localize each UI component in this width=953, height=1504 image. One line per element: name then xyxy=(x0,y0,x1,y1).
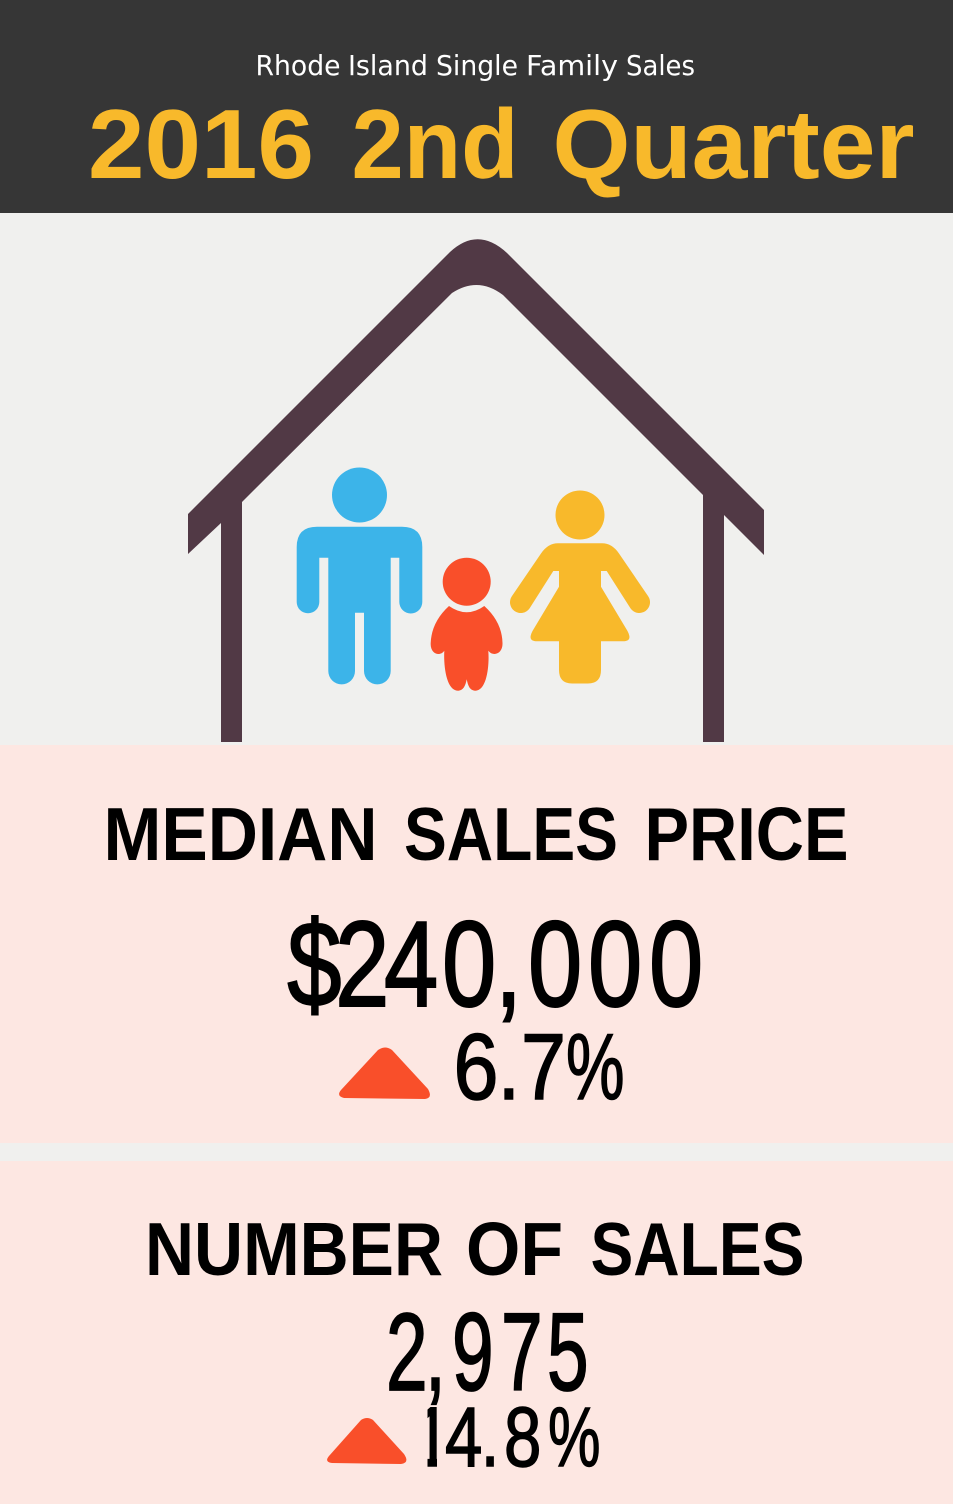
subtitle xyxy=(256,49,695,82)
panel: header xyxy=(0,0,953,213)
title: 2nd xyxy=(352,89,518,199)
icon: child xyxy=(431,558,503,691)
icon: up arrow xyxy=(327,1418,406,1464)
subtitle: Single xyxy=(436,49,518,82)
icon: up arrow xyxy=(339,1048,430,1099)
icon: house outline xyxy=(188,239,764,742)
heading: median sales price: MEDIAN xyxy=(104,792,378,876)
title xyxy=(88,89,914,199)
panel: median sales price xyxy=(0,745,953,1143)
title: 2016 xyxy=(88,89,314,199)
icon: house with family xyxy=(188,239,764,742)
subtitle: Rhode xyxy=(256,49,340,82)
heading: number of sales: NUMBER xyxy=(145,1207,443,1291)
subtitle: Sales xyxy=(626,49,695,82)
value: price change: % xyxy=(566,1016,625,1120)
value: price change xyxy=(453,1014,625,1120)
subtitle: Island xyxy=(348,49,428,82)
value: price change: 6.7 xyxy=(453,1014,566,1119)
icon: mother xyxy=(510,490,650,684)
panel: number of sales xyxy=(0,1161,953,1504)
heading: number of sales: OF xyxy=(466,1207,563,1291)
heading: median sales price: SALES xyxy=(404,792,618,876)
icon: father xyxy=(297,468,422,684)
heading: median sales price: PRICE xyxy=(644,792,848,876)
value: sales change: 1 xyxy=(413,1391,451,1485)
value: sales count: 2,975 xyxy=(386,1291,589,1413)
value: median price: $240,000 xyxy=(287,897,703,1033)
heading: median sales price xyxy=(104,792,848,876)
heading: number of sales xyxy=(145,1207,804,1291)
value: sales change: % xyxy=(548,1391,600,1485)
heading: number of sales: SALES xyxy=(590,1207,804,1291)
title: Quarter xyxy=(552,89,914,199)
value: sales change: 4.8 xyxy=(445,1391,541,1485)
value: sales change xyxy=(428,1406,599,1468)
subtitle: Family xyxy=(526,49,618,82)
